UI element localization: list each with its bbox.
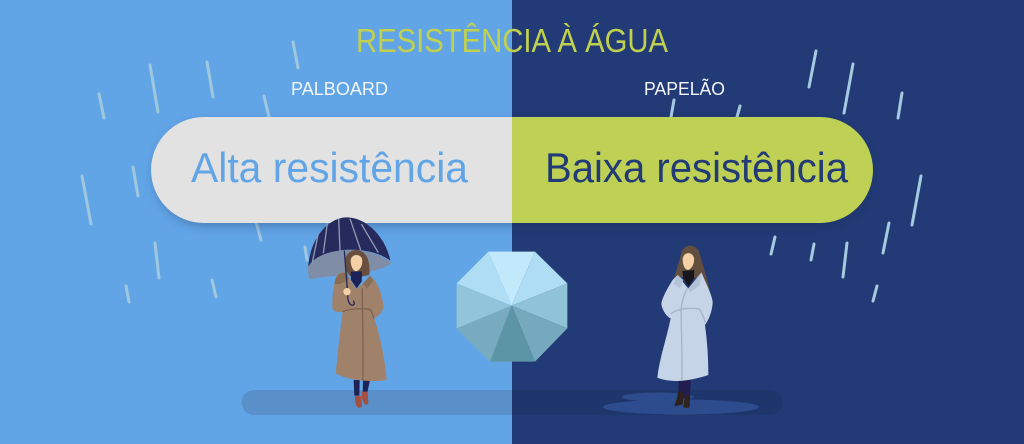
title: RESISTÊNCIA À ÁGUA [356, 22, 668, 59]
collar [673, 272, 701, 292]
face [351, 255, 362, 271]
puddle [603, 392, 759, 414]
pill text: alta resistência: Alta resistência [191, 144, 469, 191]
figure: woman without umbrella [657, 246, 713, 408]
umbrella ribs [312, 219, 378, 264]
coat [332, 273, 387, 381]
fur collar [335, 273, 373, 288]
boots [355, 396, 362, 408]
hand [343, 288, 351, 295]
coat seams [343, 288, 374, 381]
umbrella shaft and handle [344, 251, 354, 305]
pill comparison [151, 117, 873, 227]
hair [671, 246, 711, 295]
icon: closed-view umbrella [457, 252, 567, 362]
face [683, 253, 694, 270]
rain: left side [82, 42, 307, 302]
legs [354, 380, 370, 396]
coat seams [671, 288, 705, 381]
label: papelão: PAPELÃO [644, 78, 725, 99]
pill: right half [512, 117, 873, 223]
label: palboard: PALBOARD [291, 79, 388, 99]
turtleneck [351, 271, 362, 288]
turtleneck [682, 270, 694, 287]
umbrella canopy [308, 217, 390, 267]
pill: left half [151, 117, 512, 223]
panel: right background [512, 0, 1024, 444]
legs [678, 380, 691, 398]
coat [657, 272, 713, 381]
ground shadow bar [242, 390, 782, 415]
umbrella underside [308, 250, 391, 279]
panel: left background [0, 0, 512, 444]
figure: woman with umbrella [308, 217, 391, 408]
hair [345, 250, 370, 277]
boots [675, 392, 684, 406]
rain: right side [671, 51, 921, 301]
pill text: baixa resistência: Baixa resistência [545, 144, 849, 191]
